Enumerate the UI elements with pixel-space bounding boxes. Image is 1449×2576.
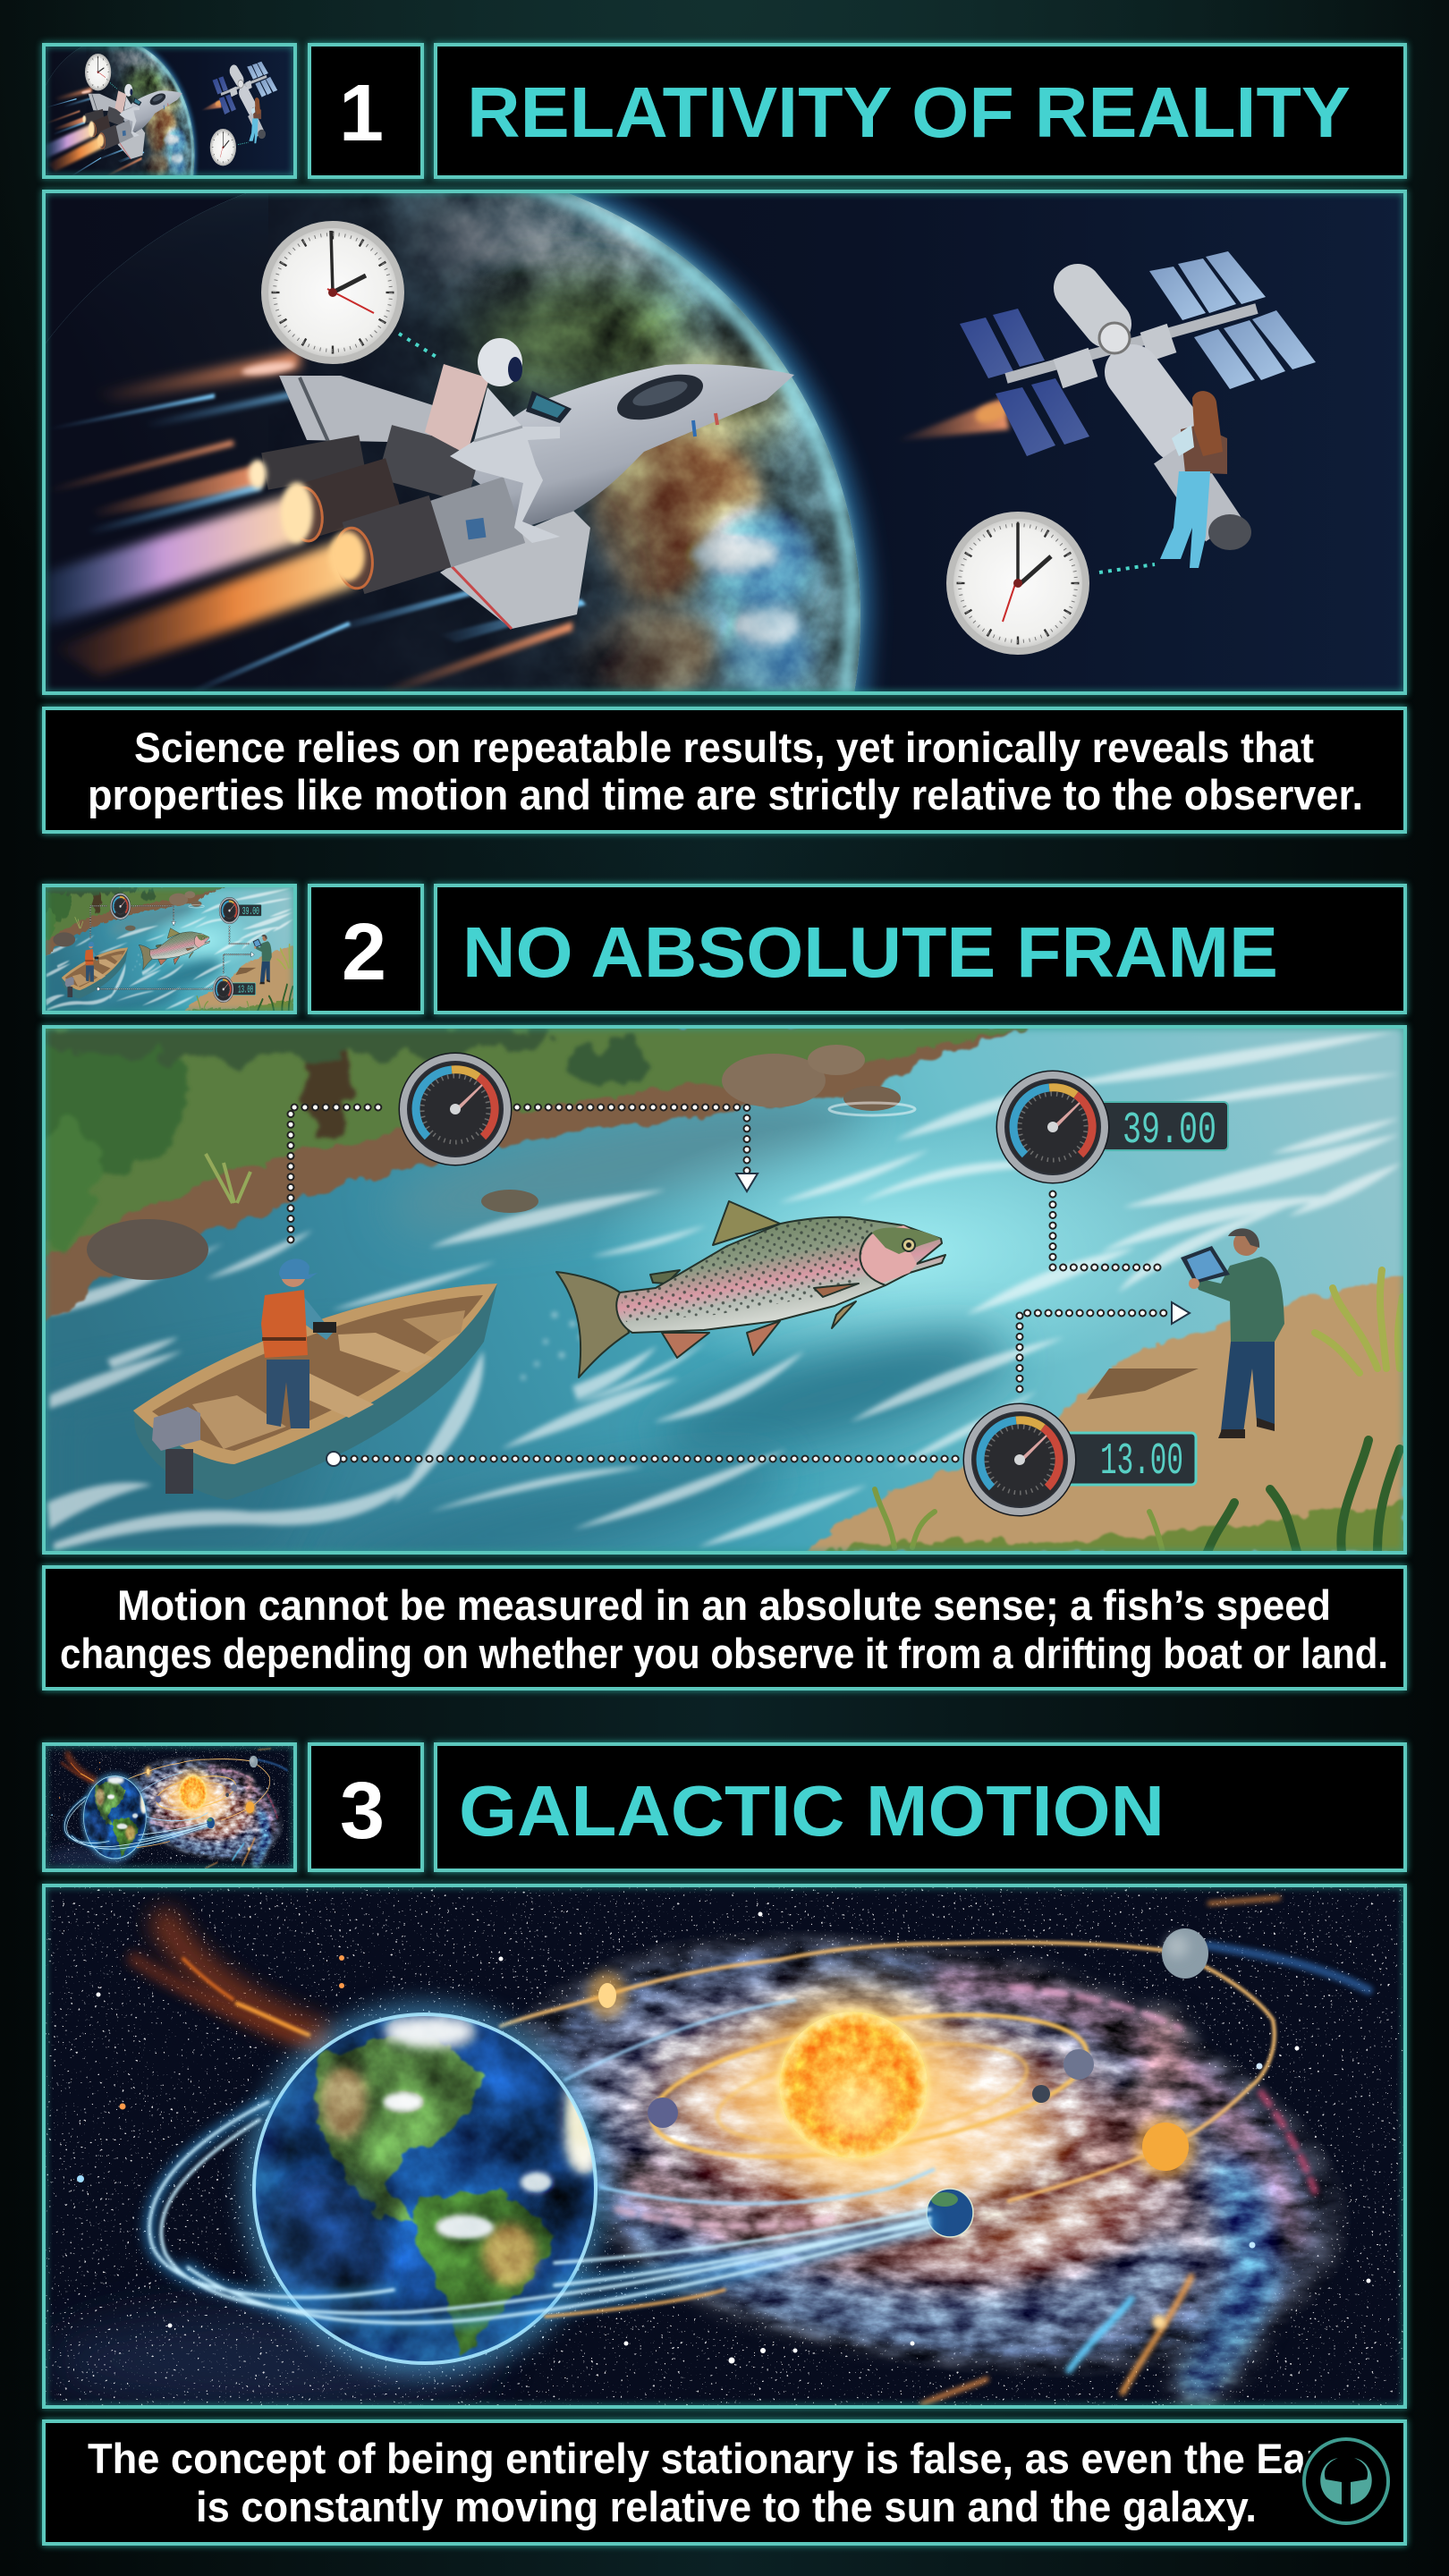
thumbnail: river scene bbox=[40, 885, 295, 1023]
title: no absolute frame: NO ABSOLUTE FRAME bbox=[462, 912, 1278, 992]
icon: clock near ship bbox=[261, 221, 404, 364]
caption 3: The concept of being entirely stationary is false, as even the Earth bbox=[88, 2435, 1360, 2482]
icon: space station bbox=[894, 251, 1316, 550]
main illustration panel: earth in the galaxy bbox=[43, 1857, 1406, 2451]
icon: outboard motor bbox=[152, 1407, 200, 1494]
connector: clock to astronaut bbox=[399, 334, 439, 359]
water highlights bbox=[47, 1030, 1402, 1552]
speedometer with readout 13.00: 13.00 bbox=[1100, 1436, 1183, 1487]
number 2 badge bbox=[309, 886, 422, 1013]
caption 3: is constantly moving relative to the sun and the galaxy. bbox=[196, 2483, 1257, 2530]
forest bbox=[18, 1015, 653, 1243]
bright stars bbox=[77, 1912, 1370, 2363]
title: relativity of reality: RELATIVITY OF REALITY bbox=[467, 72, 1351, 152]
rings around the sun bbox=[642, 1989, 1097, 2182]
galaxy spiral bbox=[449, 1857, 1394, 2451]
thumbnail: galaxy scene bbox=[44, 1739, 295, 1879]
orbit: outer golden bbox=[499, 1943, 1275, 2201]
icon: speedometer on bank bbox=[400, 1054, 511, 1165]
icon: woman observer bbox=[1160, 391, 1227, 568]
title: relativity of reality bbox=[436, 45, 1405, 177]
nebula flare bbox=[134, 1923, 322, 2044]
far bank bbox=[804, 1275, 1406, 1555]
engine flame cores bbox=[249, 460, 365, 581]
title: no absolute frame bbox=[436, 886, 1405, 1013]
near bank bbox=[43, 1025, 1038, 1324]
number 3 badge: 3 bbox=[340, 1767, 385, 1856]
icon: small earth-like planet bbox=[927, 2189, 973, 2237]
icon: astronaut with tablet bbox=[425, 338, 572, 543]
caption 2 bbox=[44, 1567, 1405, 1689]
main illustration panel: observers in space bbox=[37, 184, 1412, 700]
caption 1 bbox=[44, 708, 1405, 832]
dotted connector: gauge to boat bbox=[291, 1107, 388, 1240]
caption 3 bbox=[44, 2421, 1405, 2544]
section 3: galactic motion bbox=[43, 1739, 1406, 2544]
section 1: relativity of reality bbox=[37, 38, 1412, 839]
icon: planets bbox=[588, 1928, 1208, 2178]
dotted connector: gauge to tablet bbox=[1053, 1194, 1165, 1267]
number 3 badge bbox=[309, 1744, 422, 1870]
number 1 badge bbox=[309, 45, 422, 177]
connector: clock to woman bbox=[1099, 564, 1155, 572]
grass bbox=[875, 1270, 1402, 1552]
logo badge bbox=[1300, 2435, 1393, 2528]
icon: clock near station bbox=[946, 512, 1089, 655]
number 1 badge: 1 bbox=[339, 69, 384, 158]
dotted connector: gauge to observer bbox=[1020, 1302, 1190, 1389]
caption 2: Motion cannot be measured in an absolute sense; a fish’s speed bbox=[117, 1581, 1331, 1629]
dotted connector: gauge to fish bbox=[517, 1107, 758, 1191]
title: galactic motion bbox=[436, 1744, 1405, 1870]
icon: leaping trout bbox=[556, 1201, 945, 1377]
icon: spaceship bbox=[265, 364, 794, 629]
section 2: no absolute frame bbox=[18, 885, 1406, 1689]
icon: shore observer with tablet bbox=[1181, 1228, 1284, 1438]
icon: boater in life vest bbox=[261, 1258, 336, 1428]
icon: earth bbox=[242, 2001, 608, 2377]
main illustration panel: river and observers bbox=[18, 1015, 1406, 1604]
thumbnail: spaceship and station bbox=[38, 38, 302, 184]
speedometer with readout 39.00: 39.00 bbox=[1123, 1106, 1216, 1157]
speedometer with readout 39.00 bbox=[997, 1072, 1228, 1182]
caption 1: Science relies on repeatable results, yet ironically reveals that bbox=[134, 724, 1314, 771]
rocks bbox=[87, 1045, 915, 1280]
orbit: blue trails around earth bbox=[149, 2102, 930, 2323]
orbit: blue trails behind earth bbox=[564, 2000, 935, 2204]
dotted connector: boat to gauge bbox=[326, 1452, 956, 1466]
title: galactic motion: GALACTIC MOTION bbox=[459, 1771, 1165, 1851]
speedometer with readout 13.00 bbox=[964, 1404, 1196, 1515]
motion streaks and exhaust bbox=[47, 351, 586, 694]
icon: sun bbox=[755, 1987, 952, 2181]
number 2 badge: 2 bbox=[342, 908, 386, 997]
icon: boat with observer bbox=[133, 1258, 497, 1500]
caption 1: properties like motion and time are strictly relative to the observer. bbox=[88, 771, 1363, 818]
